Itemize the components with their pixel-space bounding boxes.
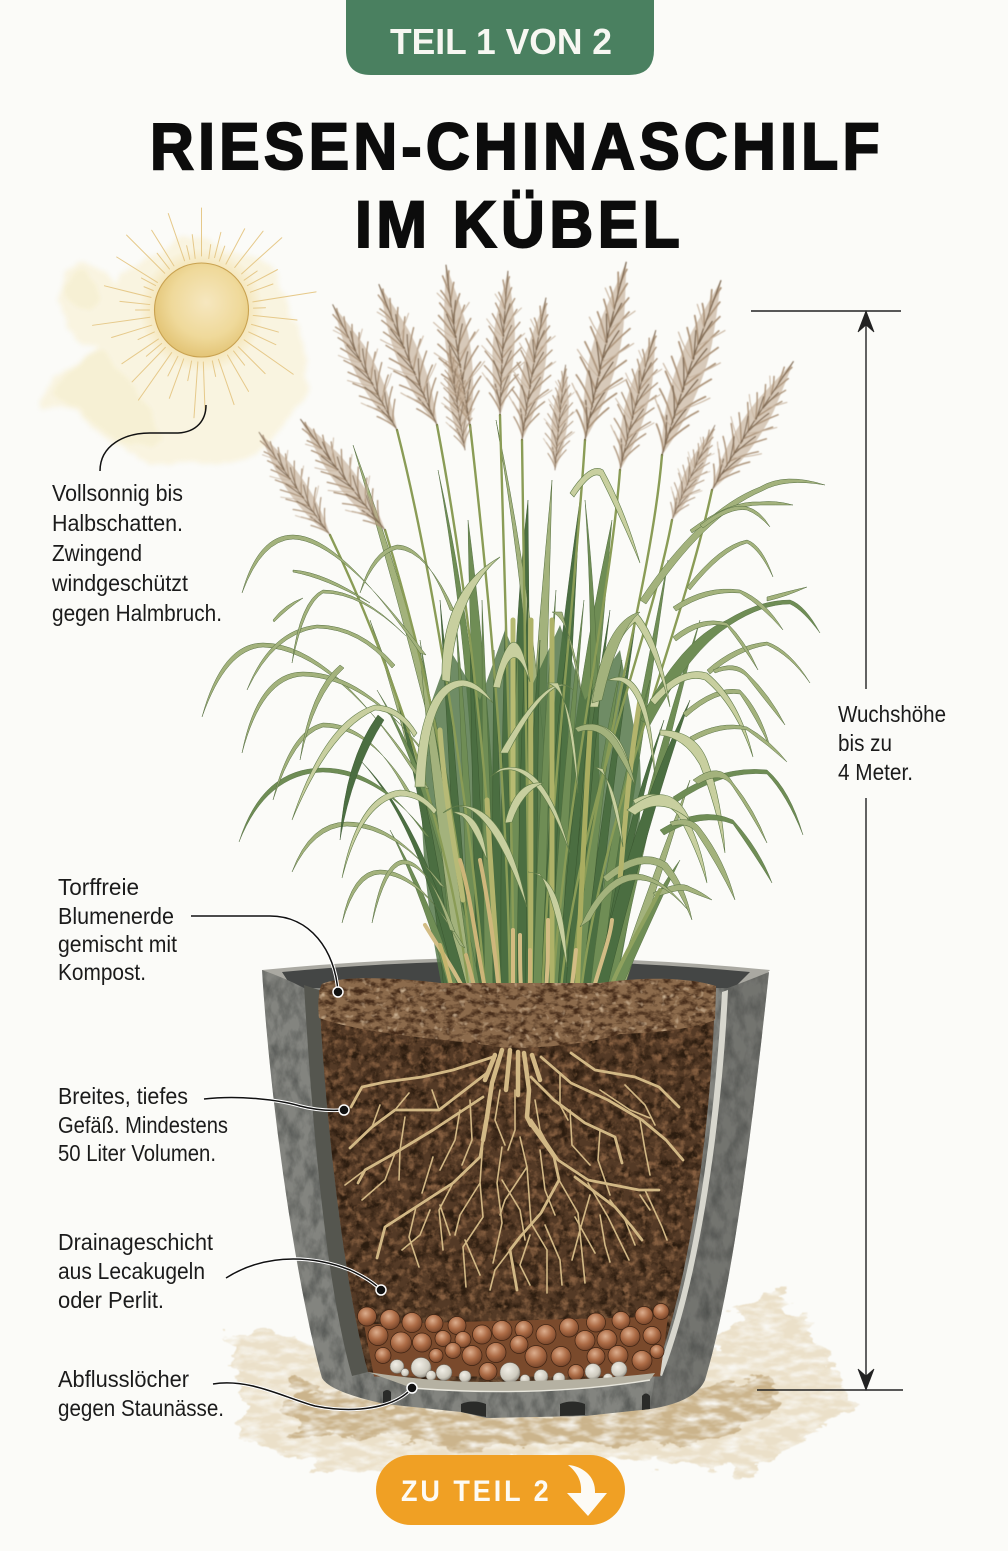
title [150, 111, 880, 262]
banner: part indicator [346, 0, 654, 75]
label: drainage: Drainageschicht [58, 1229, 214, 1255]
floor sliver [368, 1372, 655, 1392]
height label: bis zu [838, 730, 892, 756]
label: container: 50 Liter Volumen. [58, 1140, 216, 1166]
height label: Wuchshöhe [838, 701, 946, 727]
dense blades [360, 590, 700, 1000]
tan clump base stems [425, 860, 660, 1002]
label: container: Gefäß. Mindestens [58, 1112, 228, 1138]
title: IM KÜBEL [355, 189, 680, 262]
drain notches [383, 1390, 650, 1417]
label: drainage: aus Lecakugeln [58, 1258, 205, 1284]
soft foliage mass [422, 625, 641, 1003]
pale stems [440, 620, 640, 1002]
label: container [58, 1083, 228, 1166]
sun label text: gegen Halmbruch. [52, 600, 222, 626]
label: drain holes: gegen Staunässe. [58, 1395, 224, 1421]
leader: drainage [226, 1259, 386, 1295]
pot silhouette [262, 970, 769, 1418]
height label: 4 Meter. [838, 759, 913, 785]
label: drain holes [58, 1366, 224, 1421]
label: soil: gemischt mit [58, 931, 178, 957]
label: drainage [58, 1229, 214, 1313]
pot back rim and interior [262, 958, 770, 1000]
sun label text: Zwingend [52, 540, 142, 566]
label: drain holes: Abflusslöcher [58, 1366, 189, 1392]
mulch layer [318, 978, 716, 1048]
light right wall rim [656, 990, 728, 1376]
watercolor wash [42, 240, 305, 468]
sun label leader line [100, 405, 206, 471]
arching outer leaves: left [202, 535, 500, 948]
roots [345, 1050, 683, 1293]
icon: curved arrow [567, 1465, 607, 1516]
sun label text: windgeschützt [51, 570, 189, 596]
right wall shade [650, 972, 769, 1409]
icon: sun with watercolor wash [42, 208, 316, 468]
banner: part indicator: TEIL 1 VON 2 [390, 21, 612, 62]
ground wash [225, 1291, 848, 1472]
background upright blades [353, 420, 668, 1000]
label: container: Breites, tiefes [58, 1083, 188, 1109]
plant: grass clump [202, 256, 825, 1003]
sun label text: Halbschatten. [52, 510, 183, 536]
pot cutaway [262, 970, 769, 1418]
label: soil: Torffreie [58, 874, 139, 900]
clay backing [364, 1316, 668, 1376]
pot floor [368, 1372, 655, 1417]
pale foreground arcs [443, 612, 690, 967]
height dimension line [751, 311, 903, 1390]
height label [838, 701, 946, 785]
leader: soil [191, 916, 343, 997]
label: soil: Kompost. [58, 959, 146, 985]
sun disc and rays [93, 208, 316, 418]
title: RIESEN-CHINASCHILF [150, 111, 880, 184]
culms carrying plumes [330, 415, 712, 1000]
sun label text [51, 480, 222, 626]
arching outer leaves: right [570, 468, 825, 920]
label: soil [58, 874, 178, 985]
leader: container [204, 1098, 349, 1115]
leader: drain holes [213, 1383, 417, 1409]
label: drainage: oder Perlit. [58, 1287, 164, 1313]
soil body [319, 990, 715, 1390]
button: to part 2 [376, 1455, 625, 1525]
sun label text: Vollsonnig bis [52, 480, 183, 506]
plume heads [243, 256, 812, 546]
left wall inner strip [304, 985, 368, 1376]
drainage balls [358, 1304, 669, 1384]
button: to part 2: ZU TEIL 2 [401, 1475, 549, 1508]
label: soil: Blumenerde [58, 903, 174, 929]
